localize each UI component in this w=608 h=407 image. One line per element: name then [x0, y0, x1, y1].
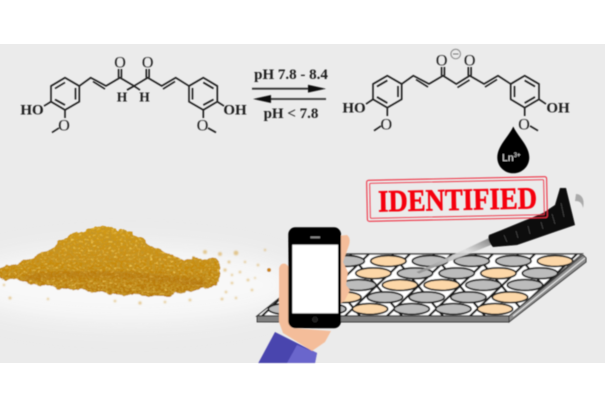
- molecule: curcumin enolate form: HO: [342, 100, 366, 116]
- molecule: curcumin enolate form: [342, 49, 570, 134]
- smartphone: [288, 227, 341, 328]
- molecule: curcumin keto form: O: [114, 54, 126, 72]
- powder pile photo: [0, 226, 300, 323]
- molecule: curcumin keto form: H: [139, 90, 150, 104]
- stamp: IDENTIFIED: IDENTIFIED: [378, 180, 537, 219]
- pipette: [416, 188, 584, 274]
- equilibrium arrows with pH labels: pH < 7.8: [264, 106, 318, 122]
- background panel: [0, 44, 605, 363]
- icon: Ln3+ drop: 3+: [514, 153, 521, 159]
- molecule: curcumin keto form: [20, 54, 247, 134]
- molecule: curcumin keto form: HO: [20, 102, 44, 118]
- molecule: curcumin keto form: O: [197, 118, 208, 134]
- molecule: curcumin keto form: O: [142, 54, 153, 72]
- equilibrium arrows with pH labels: [252, 67, 328, 122]
- molecule: curcumin enolate form: O: [464, 52, 475, 70]
- well plate: [257, 254, 586, 322]
- molecule: curcumin enolate form: O: [518, 116, 530, 134]
- molecule: curcumin keto form: H: [117, 90, 128, 104]
- icon: Ln3+ drop: [497, 126, 529, 173]
- hand holding phone: [258, 235, 350, 363]
- fingers: [331, 235, 350, 306]
- icon: Ln3+ drop: Ln: [502, 152, 514, 164]
- molecule: curcumin enolate form: O: [381, 116, 392, 134]
- wells: grid of grey and orange: [268, 256, 573, 314]
- molecule: curcumin keto form: OH: [223, 102, 247, 118]
- molecule: curcumin keto form: O: [58, 118, 70, 134]
- molecule: curcumin enolate form: OH: [546, 100, 570, 116]
- equilibrium arrows with pH labels: pH 7.8 - 8.4: [254, 67, 328, 83]
- palm: [279, 264, 331, 351]
- molecule: curcumin enolate form: O: [436, 52, 447, 70]
- screen: [292, 245, 338, 313]
- sleeve: [258, 332, 317, 363]
